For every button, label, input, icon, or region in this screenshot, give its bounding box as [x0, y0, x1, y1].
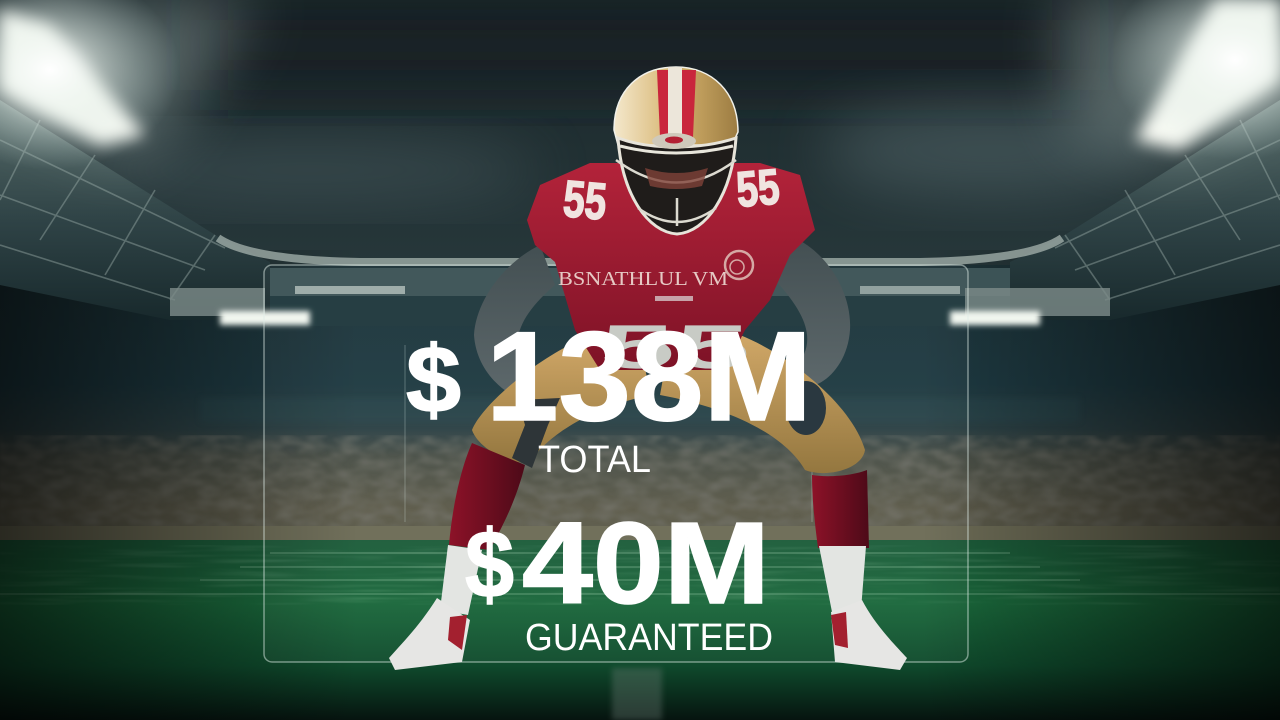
sock: left — [449, 443, 525, 550]
white sock: right — [819, 546, 866, 612]
field — [0, 526, 1280, 720]
helmet — [614, 67, 738, 234]
thigh: left — [472, 340, 650, 463]
total label: TOTAL — [538, 439, 651, 481]
jersey — [527, 158, 815, 382]
floodlight left — [0, 0, 260, 170]
jersey: BSNATHLUL VM — [558, 268, 728, 290]
player — [389, 67, 907, 670]
thigh: right — [660, 335, 865, 473]
arm: right — [775, 238, 850, 385]
guaranteed label: GUARANTEED — [525, 617, 773, 659]
floodlight right — [1060, 0, 1280, 160]
jersey: 55 — [561, 170, 609, 232]
sock: right — [812, 470, 869, 548]
side vignette — [0, 250, 1280, 720]
stands — [0, 265, 1280, 530]
cleat: right — [831, 600, 907, 670]
total value: $ — [406, 327, 461, 433]
guaranteed value: $ — [465, 511, 514, 618]
roof rim — [218, 238, 1062, 262]
arm: left — [474, 245, 555, 395]
knee brace: right — [786, 381, 826, 435]
jersey: 55 — [734, 158, 782, 218]
jersey: 55 — [600, 313, 750, 382]
guaranteed value: 40M — [522, 498, 770, 628]
stadium box lights — [170, 286, 1110, 325]
roof left — [0, 100, 270, 320]
glass panel — [264, 265, 968, 662]
cleat: left — [389, 598, 470, 670]
white sock: left — [440, 545, 482, 615]
total value: 138M — [486, 305, 812, 447]
glove: left hand — [512, 398, 560, 468]
roof right — [1010, 100, 1280, 320]
